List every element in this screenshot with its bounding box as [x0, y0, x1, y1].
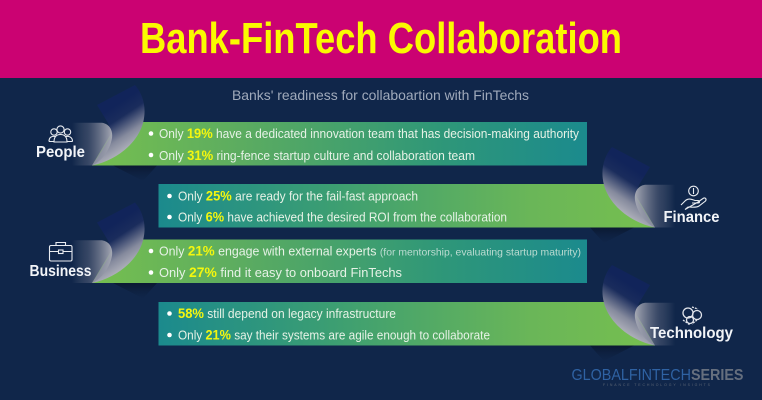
band: finance	[158, 184, 655, 228]
text: finance bullets: Only 25% are ready for the fail-fast approach	[178, 188, 418, 204]
panel: business	[30, 202, 587, 298]
curl: business	[66, 202, 157, 298]
text: business bullets	[149, 244, 581, 280]
text: people bullets: Only 31% ring-fence startup culture and collaboration team	[159, 148, 475, 163]
curl: people	[66, 85, 157, 181]
text: technology bullets: 58% still depend on legacy infrastructure	[178, 306, 396, 321]
text: technology bullets: Only 21% say their systems are agile enough to collaborate	[178, 328, 490, 342]
subtitle: Banks' readiness for collaboartion with FinTechs	[232, 87, 529, 103]
label: business: Business	[30, 263, 92, 280]
label: technology: Technology	[650, 325, 733, 342]
text: business bullets: Only 27% find it easy to onboard FinTechs	[159, 265, 402, 280]
text: technology bullets	[167, 306, 490, 342]
text: people bullets	[149, 126, 580, 163]
panel: people	[36, 85, 587, 181]
label: finance: Finance	[664, 209, 720, 226]
text: business bullets: Only 21% engage with external experts (for mentorship, evaluating startup maturity)	[159, 244, 581, 258]
icon: people	[49, 126, 72, 142]
curl: finance	[590, 147, 681, 243]
label: people: People	[36, 144, 85, 161]
curl: technology	[590, 265, 681, 361]
title banner	[0, 0, 762, 78]
icon: finance	[681, 186, 706, 210]
panel: technology	[158, 265, 733, 361]
text: finance bullets	[167, 188, 507, 224]
icon: technology	[683, 307, 702, 325]
panel: finance	[158, 147, 720, 243]
logo: Global FinTech Series: FINANCE TECHNOLOGY INSIGHTS	[603, 383, 711, 387]
logo: Global FinTech Series: GLOBALFINTECHSERIES	[572, 367, 743, 384]
band: business	[92, 240, 587, 283]
band: technology	[158, 302, 655, 346]
text: finance bullets: Only 6% have achieved the desired ROI from the collaboration	[178, 210, 507, 224]
title banner: Bank-FinTech Collaboration	[140, 15, 622, 63]
icon: business	[50, 242, 72, 261]
text: people bullets: Only 19% have a dedicated innovation team that has decision-making authority	[159, 126, 580, 141]
band: people	[92, 122, 587, 166]
